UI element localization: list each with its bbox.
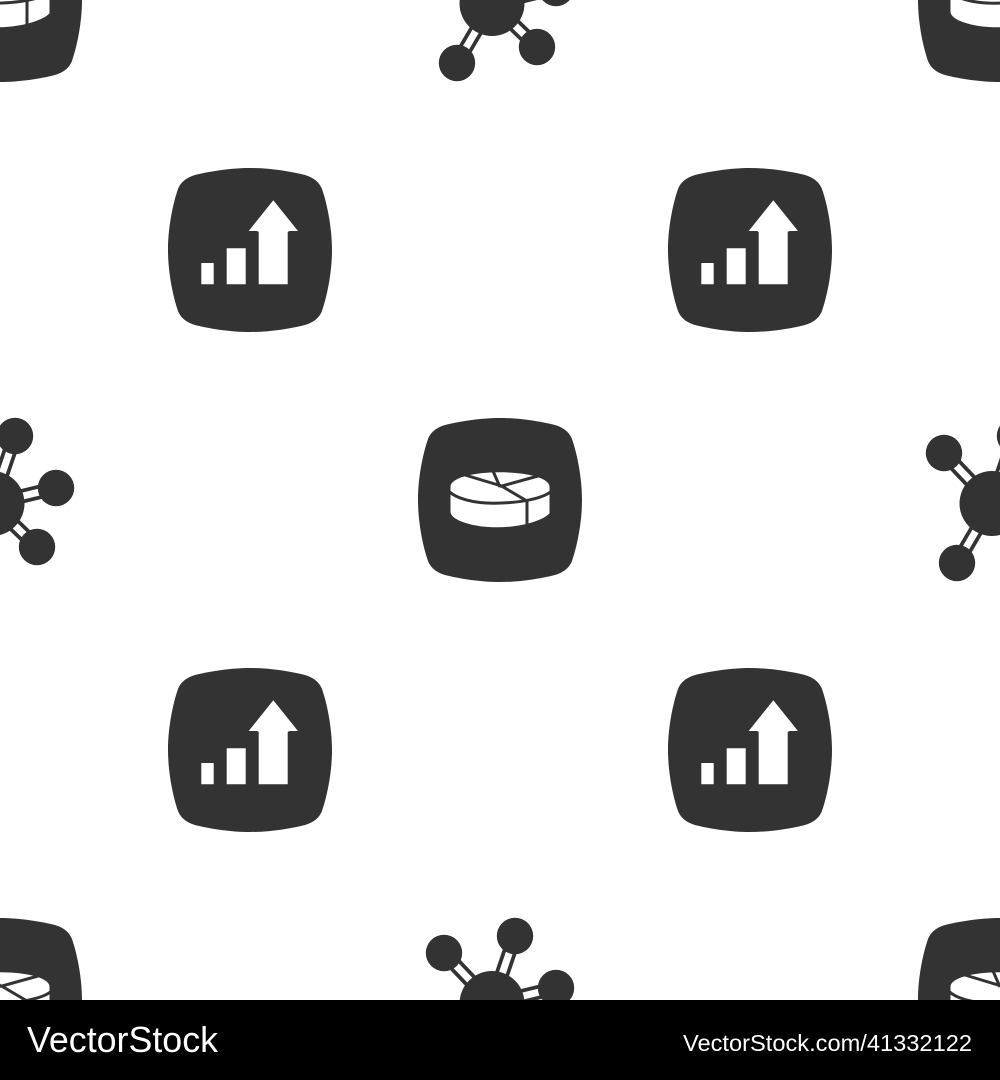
icon: pie chart top right corner	[918, 0, 1000, 82]
icon: growth bars top left	[168, 168, 332, 332]
icon: pie chart bottom right corner	[918, 918, 1000, 1080]
icon: growth bars bottom right	[668, 668, 832, 832]
watermark bar	[0, 1000, 1000, 1080]
icon: pie chart top left corner	[0, 0, 82, 82]
icon: molecule left	[0, 418, 74, 581]
icon: pie chart center	[418, 418, 582, 582]
icon: growth bars top right	[668, 168, 832, 332]
icon: growth bars bottom left	[168, 668, 332, 832]
icon: molecule top	[426, 0, 574, 81]
brand name: VectorStock	[27, 1019, 219, 1060]
image id: VectorStock.com/41332122	[683, 1030, 972, 1056]
icon: pie chart bottom left corner	[0, 918, 82, 1080]
icon: molecule right	[926, 418, 1000, 581]
icon: molecule bottom	[426, 918, 574, 1080]
